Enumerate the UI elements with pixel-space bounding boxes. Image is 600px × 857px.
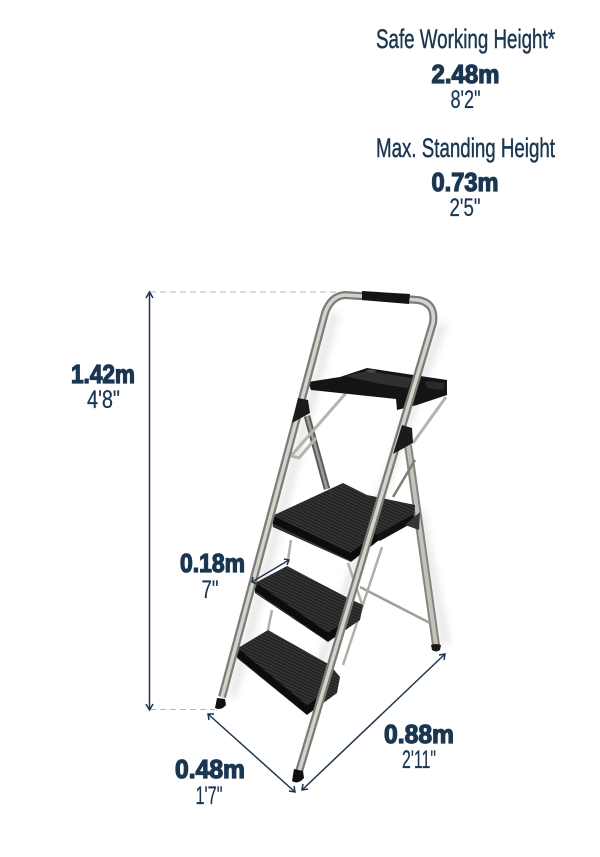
- heading: max standing height: 2'5": [450, 194, 480, 222]
- right bracket: [393, 425, 413, 454]
- grip: [362, 291, 410, 304]
- front frame: [222, 295, 433, 775]
- arrow: total height: [146, 292, 153, 710]
- left bracket: [292, 398, 310, 423]
- label: overall height: 4'8": [87, 386, 120, 414]
- soft shadow: [232, 313, 446, 697]
- front left foot: [215, 698, 226, 709]
- heading: safe working height: 8'2": [450, 86, 480, 114]
- height guide lines: [150, 292, 340, 710]
- front right foot: [292, 769, 304, 782]
- heading: max standing height: 0.73m: [432, 167, 498, 197]
- label: depth: 1'7": [196, 782, 222, 810]
- heading: safe working height: [376, 24, 555, 114]
- label: step height: [180, 548, 245, 604]
- label: width: 0.88m: [384, 719, 454, 749]
- middle step: [255, 566, 363, 642]
- label: step height: 0.18m: [180, 548, 245, 578]
- label: overall height: 1.42m: [71, 359, 135, 389]
- heading: safe working height: 2.48m: [432, 59, 500, 89]
- label: step height: 7": [202, 576, 218, 604]
- arrow: depth: [208, 714, 295, 792]
- rear legs and struts: [268, 393, 446, 665]
- label: width: [384, 719, 454, 774]
- label: overall height: [71, 359, 135, 414]
- front frame highlight: [222, 295, 433, 775]
- top step: [272, 483, 420, 562]
- bottom step: [237, 630, 340, 715]
- tray recess: [345, 370, 445, 390]
- label: width: 2'11": [402, 746, 436, 774]
- heading: max standing height: [376, 133, 555, 222]
- label: depth: 0.48m: [175, 754, 245, 784]
- tray: [308, 368, 447, 410]
- rear foot: [431, 644, 441, 652]
- arrow: step spacing: [252, 559, 289, 584]
- arrow: width: [302, 654, 445, 790]
- step ladder: [215, 291, 447, 782]
- label: depth: [175, 754, 245, 810]
